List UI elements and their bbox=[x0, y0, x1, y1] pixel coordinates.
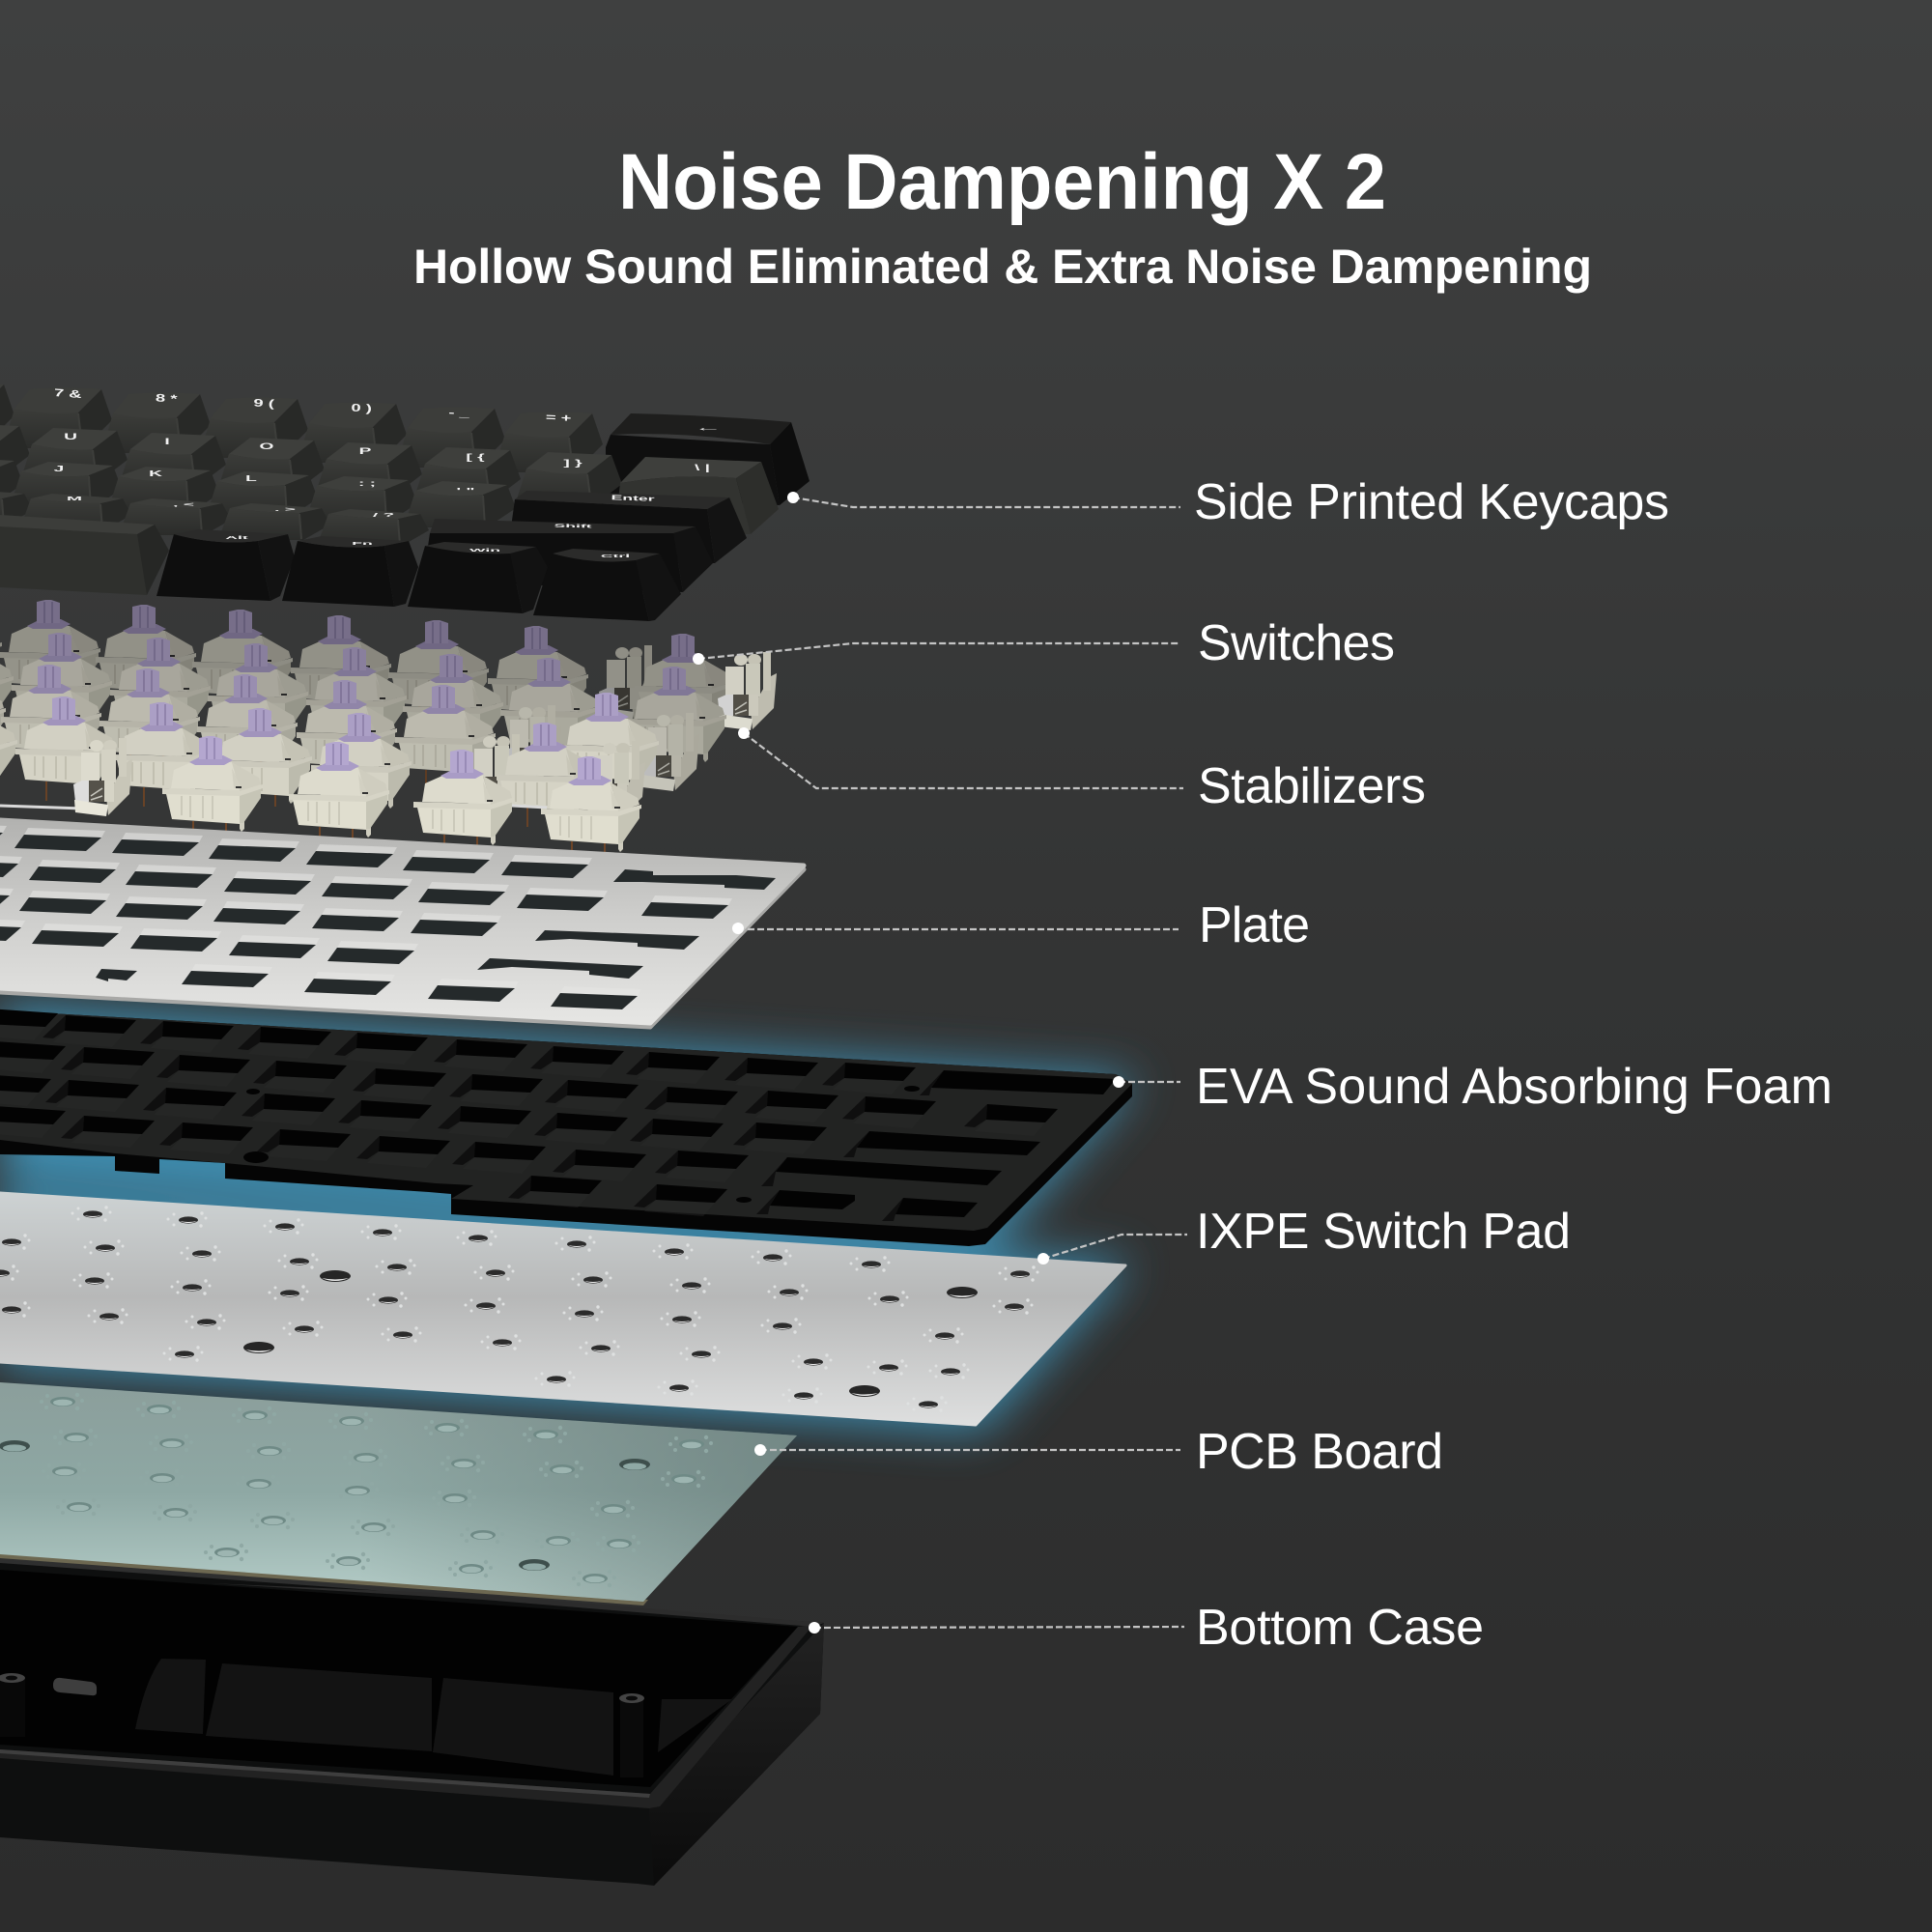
callout: PCB board: PCB Board bbox=[1196, 1424, 1443, 1480]
key legends: : ; bbox=[358, 479, 376, 488]
front inner rim bbox=[0, 1625, 813, 1808]
switch row A bbox=[0, 594, 735, 738]
keycap: shift bbox=[423, 519, 713, 592]
key legends: 7 & bbox=[54, 386, 82, 401]
key legends: - _ bbox=[448, 407, 470, 420]
keycap: enter bbox=[507, 491, 747, 563]
case silhouette bbox=[0, 1563, 824, 1886]
plate surface bbox=[0, 820, 804, 1023]
key legends: I bbox=[164, 437, 170, 447]
key legends: \ | bbox=[695, 463, 710, 473]
keycap: ctrl bbox=[533, 549, 681, 621]
case right wall bbox=[649, 1623, 824, 1886]
layer: switches and stabilizers bbox=[0, 594, 777, 861]
layer: IXPE switch pad bbox=[0, 1193, 1125, 1425]
key legends bbox=[54, 386, 722, 558]
layer: PCB board bbox=[0, 1382, 797, 1605]
pcb surface bbox=[0, 1382, 797, 1602]
key legends: O bbox=[260, 441, 274, 452]
key legends: / ? bbox=[373, 512, 394, 518]
plate key cutouts bbox=[0, 823, 732, 1009]
key legends: Fn bbox=[352, 541, 373, 546]
key legends: Win bbox=[469, 548, 500, 553]
callout: side printed keycaps: Side Printed Keycaps bbox=[1194, 474, 1669, 530]
key legends: P bbox=[359, 446, 371, 457]
switch row C bbox=[0, 660, 699, 791]
plate edge bbox=[0, 824, 804, 1027]
key legends: [ { bbox=[466, 452, 485, 463]
layer: plate bbox=[0, 820, 804, 1027]
pcb holes bbox=[0, 1393, 713, 1587]
keycap: space bar bbox=[0, 515, 169, 595]
switch row D bbox=[0, 692, 659, 827]
title: Noise Dampening X 2 bbox=[618, 138, 1386, 226]
subtitle: Hollow Sound Eliminated & Extra Noise Dampening bbox=[413, 240, 1592, 294]
keycap: backspace bbox=[606, 413, 810, 505]
keycap row: numbers bbox=[0, 383, 603, 472]
callout: stabilizers bbox=[738, 727, 1426, 814]
case interior bbox=[0, 1570, 798, 1787]
key legends: , < bbox=[173, 501, 194, 507]
keycap: fn bbox=[282, 536, 418, 607]
switch row E bbox=[162, 736, 641, 861]
key legends: Enter bbox=[611, 494, 656, 502]
key legends: U bbox=[64, 432, 77, 442]
keycap row: U I O P bbox=[0, 423, 622, 505]
key legends: Ctrl bbox=[601, 554, 630, 558]
callout: PCB board bbox=[754, 1424, 1443, 1480]
stabilizer: right end bbox=[718, 652, 777, 730]
layer: EVA sound absorbing foam bbox=[0, 1009, 1132, 1246]
callout: switches: Switches bbox=[1198, 615, 1395, 671]
key legends: ] } bbox=[563, 458, 582, 469]
key legends: ' " bbox=[457, 487, 474, 496]
pcb edge bbox=[0, 1550, 648, 1605]
stabilizer: left bbox=[73, 738, 132, 816]
keycap: alt bbox=[156, 529, 295, 601]
layer: bottom case bbox=[0, 1563, 824, 1886]
pad holes bbox=[0, 1206, 1039, 1412]
callout: bottom case: Bottom Case bbox=[1196, 1600, 1484, 1656]
callout: EVA foam: EVA Sound Absorbing Foam bbox=[1196, 1059, 1833, 1115]
keycap: backslash bbox=[614, 457, 779, 534]
plate stabilizer cutouts bbox=[96, 869, 776, 981]
key legends: K bbox=[149, 469, 162, 478]
blue glow behind foam and pad bbox=[0, 1005, 1138, 1432]
USB cutout bbox=[53, 1678, 97, 1695]
key legends: Alt bbox=[225, 535, 249, 540]
rear rim bbox=[210, 1583, 824, 1627]
pad surface bbox=[0, 1193, 1125, 1425]
layer: side printed keycaps bbox=[0, 383, 810, 621]
key legends: ← bbox=[695, 423, 722, 433]
stabilizer wires bbox=[0, 806, 547, 809]
switch row B bbox=[0, 628, 726, 771]
key legends: M bbox=[67, 496, 82, 501]
key legends: J bbox=[54, 465, 64, 473]
foam wide cutouts bbox=[243, 1070, 1116, 1221]
case floor panels bbox=[135, 1659, 732, 1776]
keycap row: M comma period slash bbox=[0, 489, 429, 546]
key legends: L bbox=[245, 474, 257, 483]
key legends: . > bbox=[274, 506, 296, 512]
key legends: Shift bbox=[554, 523, 593, 528]
keycap row: J K L bbox=[0, 457, 516, 527]
key legends: = + bbox=[546, 412, 572, 425]
key legends: 8 * bbox=[156, 392, 178, 406]
callout: bottom case bbox=[809, 1600, 1484, 1656]
keycap: menu bbox=[408, 542, 548, 613]
foam thickness bbox=[0, 1010, 1132, 1246]
foam cutouts bbox=[0, 1009, 1058, 1216]
foam surface bbox=[0, 1010, 1132, 1231]
key legends: 9 ( bbox=[253, 397, 275, 411]
key legends: 0 ) bbox=[351, 402, 372, 414]
callout: switches bbox=[693, 615, 1395, 671]
callout: stabilizers: Stabilizers bbox=[1198, 758, 1426, 814]
callout: IXPE pad bbox=[1037, 1204, 1571, 1264]
callout: IXPE pad: IXPE Switch Pad bbox=[1196, 1204, 1571, 1260]
callout: plate bbox=[732, 897, 1310, 953]
callout: side printed keycaps bbox=[787, 474, 1669, 530]
screw posts bbox=[0, 1673, 644, 1777]
callout: plate: Plate bbox=[1199, 897, 1310, 953]
